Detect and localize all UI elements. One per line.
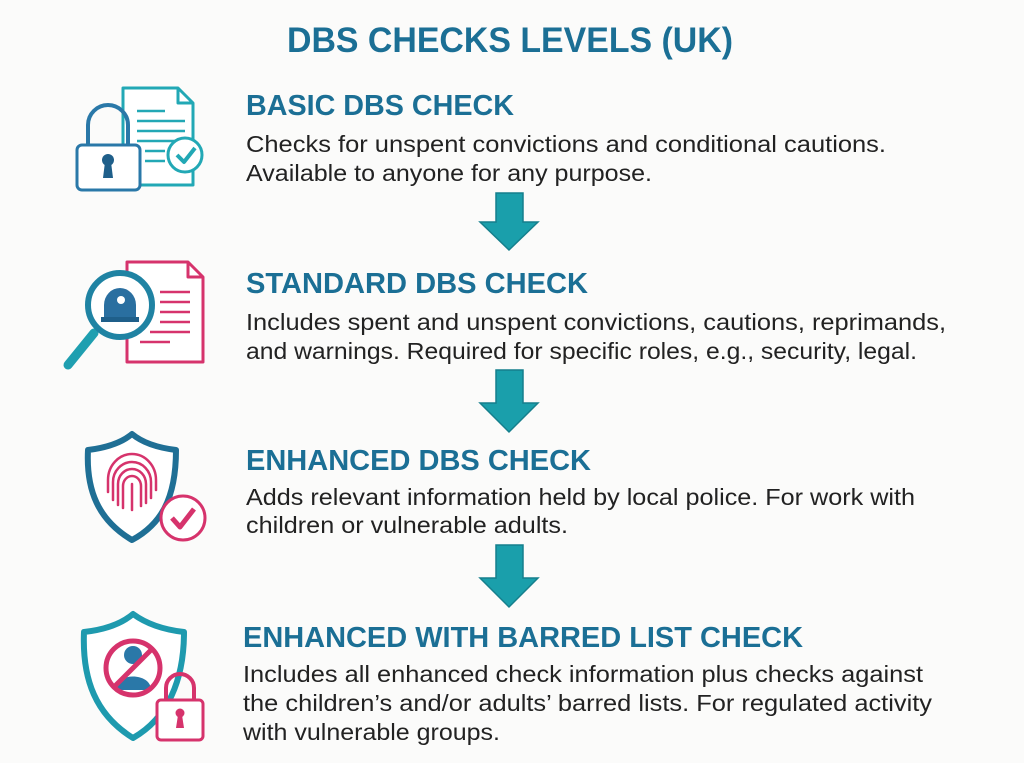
icon: shield with barred person and lock xyxy=(84,614,203,740)
text: basic: Checks for unspent convictions and conditional cautions. xyxy=(246,131,886,157)
text: enhanced: children or vulnerable adults. xyxy=(246,512,568,538)
text: enhanced xyxy=(246,484,915,538)
heading: barred: ENHANCED WITH BARRED LIST CHECK xyxy=(243,622,803,654)
icon: shield with fingerprint and check xyxy=(88,434,205,540)
text: basic xyxy=(246,131,886,186)
arrow 2 xyxy=(480,370,538,432)
heading: basic: BASIC DBS CHECK xyxy=(246,90,514,122)
text: barred: the children’s and/or adults’ barred lists. For regulated activity xyxy=(243,690,932,716)
text: basic: Available to anyone for any purpose. xyxy=(246,160,652,186)
text: barred: Includes all enhanced check information plus checks against xyxy=(243,661,923,687)
icon: magnifier with police helmet and document xyxy=(68,262,203,365)
text: barred: with vulnerable groups. xyxy=(242,719,500,745)
arrow 1 xyxy=(480,193,538,250)
arrow 3 xyxy=(480,545,538,607)
title: DBS CHECKS LEVELS (UK) xyxy=(287,21,733,60)
heading: enhanced: ENHANCED DBS CHECK xyxy=(246,445,591,477)
heading: standard: STANDARD DBS CHECK xyxy=(246,268,588,300)
text: barred xyxy=(242,661,932,745)
text: standard: and warnings. Required for specific roles, e.g., security, legal. xyxy=(246,338,917,364)
text: enhanced: Adds relevant information held by local police. For work with xyxy=(246,484,915,510)
icon: lock and document xyxy=(77,88,202,190)
text: standard: Includes spent and unspent convictions, cautions, reprimands, xyxy=(246,309,946,335)
text: standard xyxy=(246,309,946,364)
